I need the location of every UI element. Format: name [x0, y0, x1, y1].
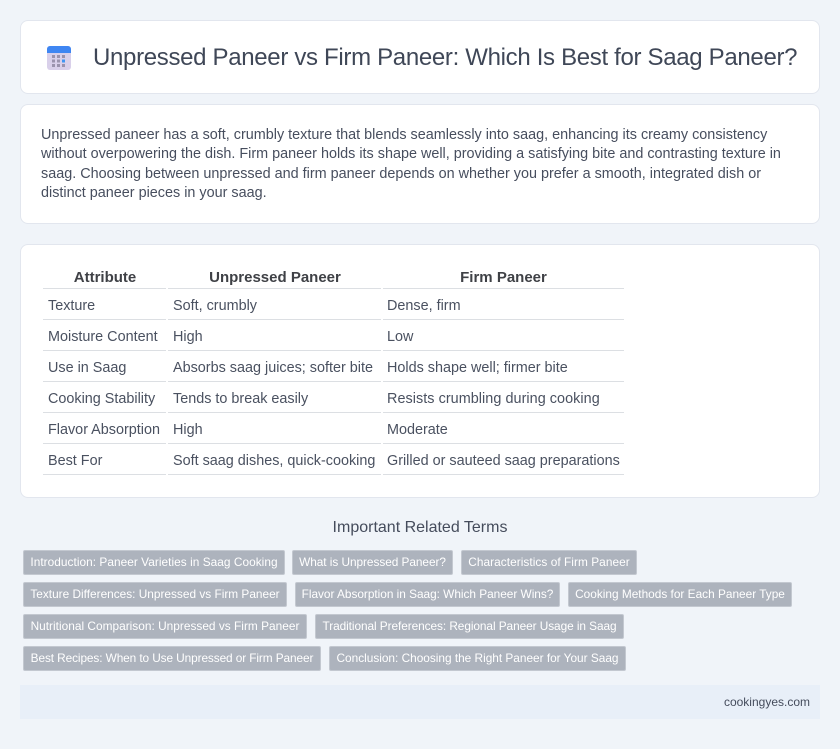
comparison table — [43, 269, 624, 475]
panel: title card — [20, 20, 820, 94]
row: flavor absorption — [48, 422, 448, 438]
icon: calendar — [47, 46, 71, 70]
chip: Nutritional Comparison: Unpressed vs Firm Paneer — [31, 619, 299, 633]
chip — [23, 614, 307, 639]
chip — [23, 550, 285, 575]
chip: What is Unpressed Paneer? — [299, 555, 446, 569]
row: texture: Dense, firm — [387, 298, 461, 314]
row: texture — [48, 298, 461, 314]
row: texture: Soft, crumbly — [173, 298, 257, 314]
row: cooking stability — [48, 391, 600, 407]
chip — [23, 646, 321, 671]
row: moisture content: Moisture Content — [48, 329, 158, 345]
intro paragraph: without overpowering the dish. Firm paneer holds its shape well, providing a satisfying bite and contrasting texture in — [41, 146, 781, 162]
row: moisture content — [48, 329, 414, 345]
table header — [74, 269, 547, 286]
heading: important related terms: Important Related Terms — [333, 519, 507, 536]
chip: Best Recipes: When to Use Unpressed or Firm Paneer — [31, 651, 313, 665]
title: Unpressed Paneer vs Firm Paneer: Which Is Best for Saag Paneer? — [93, 44, 797, 71]
chip: Conclusion: Choosing the Right Paneer for Your Saag — [337, 651, 618, 665]
panel: introduction — [20, 104, 820, 224]
intro paragraph: saag. Choosing between unpressed and firm paneer depends on whether you prefer a smooth, integrated dish or — [41, 166, 761, 182]
chip: Traditional Preferences: Regional Paneer Usage in Saag — [322, 619, 617, 633]
row: cooking stability: Cooking Stability — [48, 391, 155, 407]
row: flavor absorption: Moderate — [387, 422, 448, 438]
row: moisture content: High — [173, 329, 203, 345]
panel: comparison table — [20, 244, 820, 498]
row: best for: Best For — [48, 453, 102, 469]
chip: Flavor Absorption in Saag: Which Paneer Wins? — [302, 587, 553, 601]
table header: Attribute — [74, 269, 136, 286]
chip: Cooking Methods for Each Paneer Type — [575, 587, 785, 601]
chip: Texture Differences: Unpressed vs Firm Paneer — [30, 587, 280, 601]
chip — [461, 550, 637, 575]
footer bar — [20, 685, 820, 719]
intro paragraph — [41, 126, 781, 201]
row: use in saag: Absorbs saag juices; softer bite — [173, 360, 373, 376]
row: best for: Grilled or sauteed saag preparations — [387, 453, 620, 469]
footer source: cookingyes.com — [724, 695, 810, 709]
row: texture: Texture — [48, 298, 95, 314]
intro paragraph: Unpressed paneer has a soft, crumbly texture that blends seamlessly into saag, enhancing its creamy consistency — [41, 126, 767, 142]
chip — [329, 646, 626, 671]
row: cooking stability: Resists crumbling during cooking — [387, 391, 600, 407]
table header: Unpressed Paneer — [209, 269, 341, 286]
chip — [295, 582, 560, 607]
chip — [315, 614, 624, 639]
chip — [568, 582, 792, 607]
row: best for: Soft saag dishes, quick-cooking — [173, 453, 375, 469]
chip — [292, 550, 453, 575]
row: use in saag — [48, 360, 568, 376]
row: flavor absorption: Flavor Absorption — [48, 422, 160, 438]
row: cooking stability: Tends to break easily — [173, 391, 308, 407]
chip: Characteristics of Firm Paneer — [468, 555, 630, 569]
row: use in saag: Use in Saag — [48, 360, 126, 376]
row: moisture content: Low — [387, 329, 413, 345]
table header: Firm Paneer — [460, 269, 547, 286]
row: use in saag: Holds shape well; firmer bite — [387, 360, 568, 376]
chip: Introduction: Paneer Varieties in Saag Cooking — [30, 555, 278, 569]
row: best for — [48, 453, 620, 469]
chip — [23, 582, 287, 607]
row: flavor absorption: High — [173, 422, 203, 438]
related terms chips — [23, 550, 792, 671]
intro paragraph: distinct paneer pieces in your saag. — [41, 185, 267, 201]
